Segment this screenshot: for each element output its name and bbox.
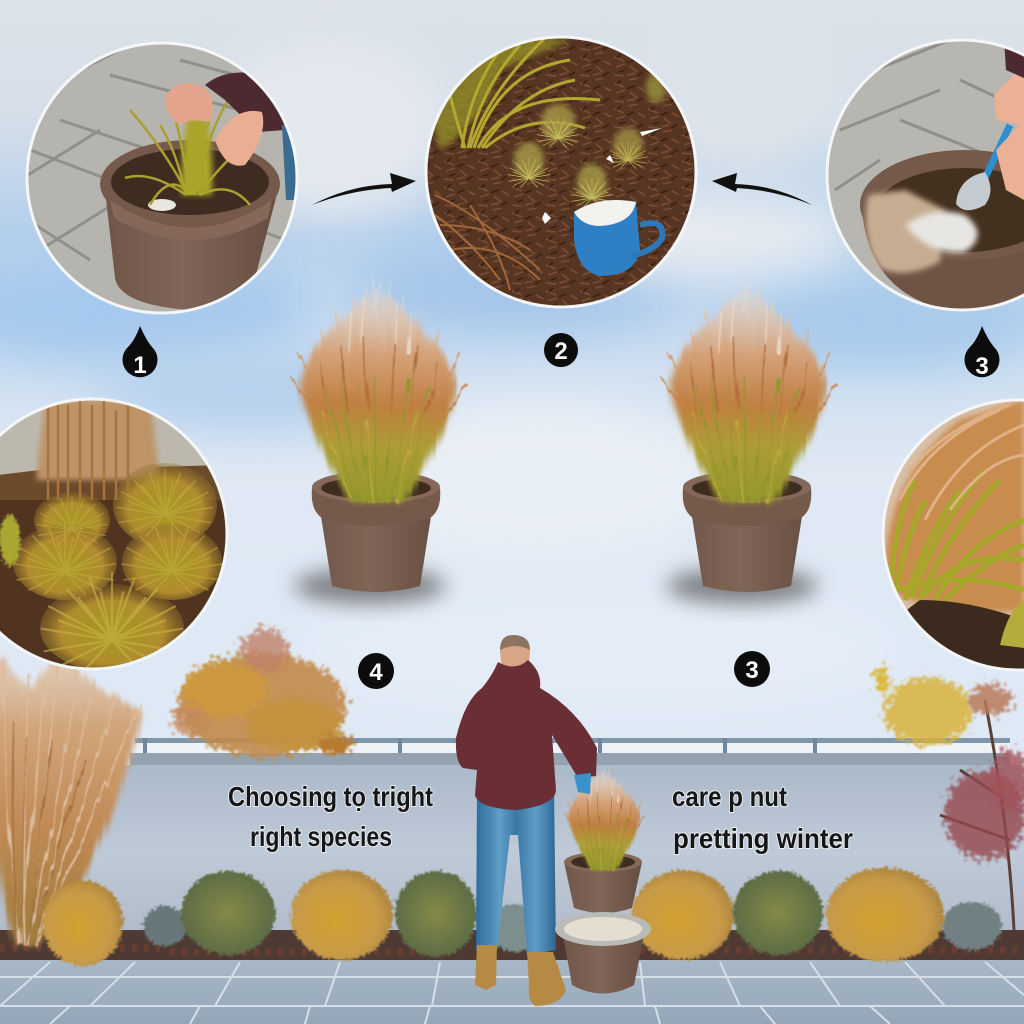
text: choosing species: Choosing tọ tright [228,781,433,812]
text: choosing species [228,781,433,852]
potted grass left [290,276,468,604]
step 2 ring [426,37,696,307]
arrow: step 1 to 2 [312,173,416,205]
text: winter care: pretting winter [673,823,853,854]
bucket of grit [555,912,651,994]
paving [0,960,1024,1024]
step 4 ring [0,399,227,669]
panel: step 5 grass close-up photo [880,395,1024,680]
panel: step 1 planting photo [28,44,296,312]
glove [574,773,591,794]
potted grass right [660,276,838,604]
badge 4: 4 [369,659,383,686]
badge 4 [358,653,394,689]
small potted grass [564,766,645,913]
step 5 ring [883,400,1024,670]
large ornamental grass left [0,645,142,945]
step 3 ring [827,40,1024,310]
head [500,635,530,672]
sky background [0,0,1024,780]
hair [500,635,530,650]
panel: step 3 soil photo [825,35,1024,315]
boots [475,945,566,1006]
badge 2: 2 [554,338,568,365]
text: winter care: care p nut [672,781,787,812]
autumn shrub on wall [172,628,353,757]
autumn tree right [874,666,1024,930]
person [456,635,597,1006]
step 1 ring [27,43,297,313]
hoodie [456,660,597,810]
badge 3 lower: 3 [745,657,759,684]
badge 1: 1 [133,352,147,379]
wall [0,765,1024,940]
badge 1 [122,326,158,379]
text: winter care [672,781,853,854]
low shrubs row [43,868,1002,966]
badge 3 lower [734,651,770,687]
badge 2 [544,333,578,367]
legs [476,790,556,955]
railing [130,738,1010,766]
badge 3 top: 3 [975,353,989,380]
panel: step 2 mulch bed photo [428,38,694,306]
arrow: step 3 to 2 [712,173,812,205]
panel: step 4 established grasses photo [0,395,230,675]
mulch bed [0,930,1024,964]
text: choosing species: right species [250,821,392,852]
badge 3 top [964,326,1000,380]
